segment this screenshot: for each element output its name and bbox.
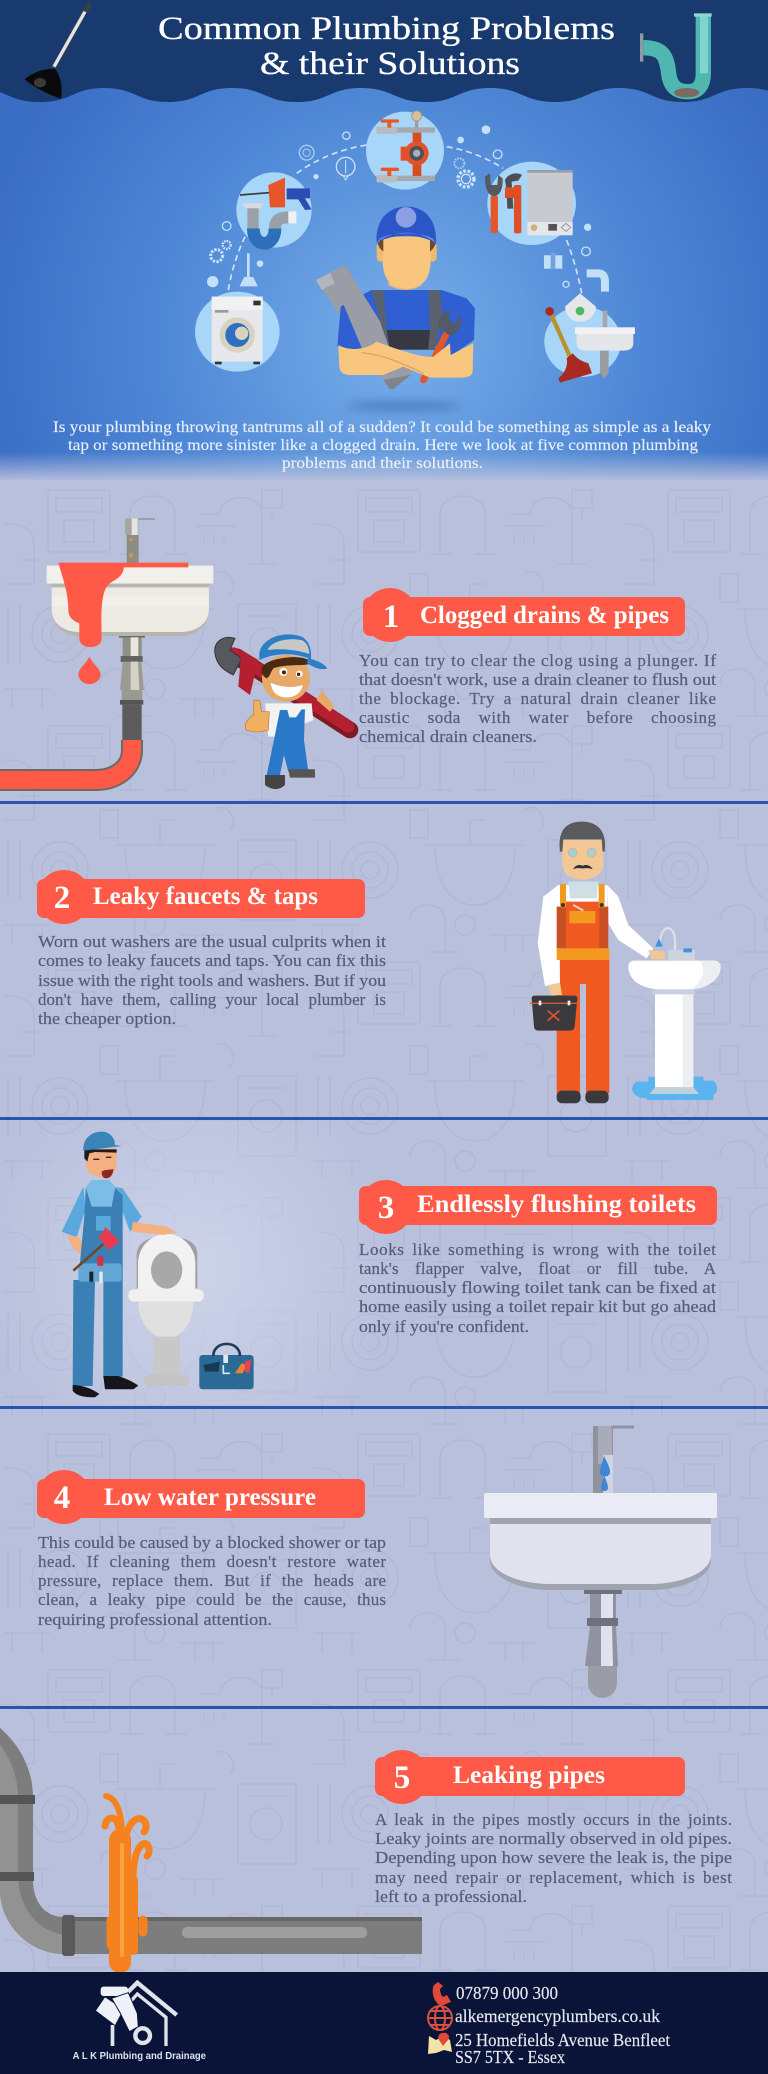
crossed arms [338, 342, 473, 378]
text: 5: Leaky joints are normally observed in old pipes. [375, 1829, 732, 1848]
text: 2 [38, 932, 387, 1028]
text: 5: Depending upon how severe the leak is, the pipe [375, 1848, 732, 1867]
illustration: grey pipe with orange leak [0, 1728, 422, 1962]
overalls [372, 290, 443, 350]
footer [0, 1972, 768, 2074]
website: alkemergencyplumbers.co.uk [455, 2006, 660, 2026]
heading: 1 [363, 588, 685, 642]
text: 1: You can try to clear the clog using a plunger. If [359, 651, 716, 670]
icon: plunger [25, 5, 89, 99]
text: 1: caustic soda with water before choosing [359, 708, 716, 727]
illustration: cartoon plumber with wrench [215, 634, 350, 789]
header band with wave edge [0, 0, 768, 102]
text: 3: tank's flapper valve, float or fill tube. A [359, 1259, 717, 1278]
illustration: wall basin with dripping tap [484, 1426, 717, 1698]
soft glow in section 3 [0, 1121, 480, 1405]
logo [73, 1983, 206, 2062]
text: 4: head. If cleaning them doesn't restore water [38, 1552, 386, 1571]
text: 4: This could be caused by a blocked shower or tap [38, 1533, 386, 1552]
heading: 4 [37, 1470, 365, 1524]
heading: 3: 3 [378, 1190, 394, 1226]
icon: phone [433, 1982, 451, 2005]
text: 5: left to a professional. [375, 1887, 527, 1906]
panel: 3 flushing toilets [62, 1132, 254, 1397]
icon: teal U-bend pipe [640, 13, 712, 97]
heading: 4: 4 [54, 1480, 70, 1516]
text: 2: issue with the right tools and washers. But if you [38, 971, 387, 990]
cap [377, 207, 436, 243]
central plumber [316, 207, 475, 411]
logo: A L K Plumbing and Drainage [73, 2051, 206, 2062]
text: 1: the blockage. Try a natural drain cleaner like [359, 689, 716, 708]
address [455, 2030, 670, 2067]
text: 3 [359, 1240, 717, 1336]
panel: 1 clogged drains [0, 518, 350, 789]
panel: 2 leaky faucets [530, 822, 721, 1103]
bubble: pump [366, 111, 444, 190]
text: 5 [375, 1810, 732, 1906]
icon: map pin [428, 2033, 452, 2054]
page background: section panels [0, 470, 768, 1974]
title: & their Solutions [260, 46, 520, 82]
heading: 5 [375, 1750, 685, 1804]
illustration: clogged sink and pipe [0, 518, 213, 780]
text: 2: the cheaper option. [38, 1009, 176, 1028]
phone number: 07879 000 300 [456, 1983, 558, 2003]
orange leak jets [105, 1796, 149, 1962]
panel: 4 low water pressure [484, 1426, 717, 1698]
address: 25 Homefields Avenue Benfleet [455, 2030, 670, 2050]
text: 5: A leak in the pipes mostly occurs in the joints. [375, 1810, 732, 1829]
text: 4: requiring professional attention. [38, 1610, 272, 1629]
section dividers [0, 801, 768, 1709]
bubble: washing machine [195, 292, 280, 372]
heading: 3 [359, 1180, 717, 1234]
bubble: boiler and wrenches [485, 162, 576, 245]
heading: 2: Leaky faucets & taps [93, 883, 318, 910]
text: 4: pressure, replace them. But if the heads are [38, 1571, 386, 1590]
dashed connector arcs [228, 145, 582, 293]
intro text: problems and their solutions. [282, 455, 483, 472]
background line-art texture [0, 480, 768, 1972]
neck and face [388, 273, 422, 290]
heading: 4: Low water pressure [104, 1484, 316, 1511]
pipe over shirt [330, 265, 397, 352]
heading: 2: 2 [54, 880, 70, 916]
icon: globe [428, 2006, 452, 2030]
title [158, 11, 615, 82]
illustration: plumber with toilet and tool bag [62, 1132, 254, 1397]
text: 4: clean, a leaky pipe could be the cause, thus [38, 1590, 386, 1609]
text: 5: may need repair or replacement, which is best [375, 1868, 732, 1887]
intro text: tap or something more sinister like a clogged drain. Here we look at five common plumbing [68, 437, 698, 454]
address: SS7 5TX - Essex [455, 2047, 565, 2067]
text: 1 [359, 651, 716, 746]
heading: 5: Leaking pipes [453, 1762, 605, 1789]
text: 3: Looks like something is wrong with the toilet [359, 1240, 716, 1259]
text: 2: don't have them, calling your local plumber is [38, 990, 386, 1009]
title: Common Plumbing Problems [158, 11, 615, 47]
floating decoration dots, rings and gears [207, 125, 605, 292]
heading: 1: 1 [383, 599, 399, 635]
intro text [53, 419, 711, 472]
text: 2: comes to leaky faucets and taps. You can fix this [38, 951, 386, 970]
text: 2: Worn out washers are the usual culprits when it [38, 932, 386, 951]
illustration: plumber at pedestal sink [530, 822, 721, 1103]
text: 3: continuously flowing toilet tank can be fixed at [359, 1278, 716, 1297]
hero panel [0, 80, 768, 482]
heading: 5: 5 [394, 1760, 410, 1796]
text: 3: home easily using a toilet repair kit but go ahead [359, 1297, 717, 1316]
intro text: Is your plumbing throwing tantrums all of a sudden? It could be something as simple as a leaky [53, 419, 711, 436]
heading: 1: Clogged drains & pipes [420, 602, 669, 629]
text: 1: chemical drain cleaners. [359, 727, 537, 746]
text: 4 [38, 1533, 386, 1629]
panel: 5 leaking pipes [0, 1728, 422, 1962]
pipe [316, 265, 413, 389]
bubble: drain auger and trap [236, 172, 312, 248]
text: 1: that doesn't work, use a drain cleaner to flush out [359, 670, 716, 689]
wrench [423, 333, 447, 380]
bubble: sink, plunger and mask [544, 293, 635, 383]
text: 3: only if you're confident. [359, 1317, 529, 1336]
shirt [337, 290, 475, 357]
heading: 2 [37, 870, 365, 924]
heading: 3: Endlessly flushing toilets [417, 1191, 696, 1218]
hero illustration [195, 111, 635, 411]
